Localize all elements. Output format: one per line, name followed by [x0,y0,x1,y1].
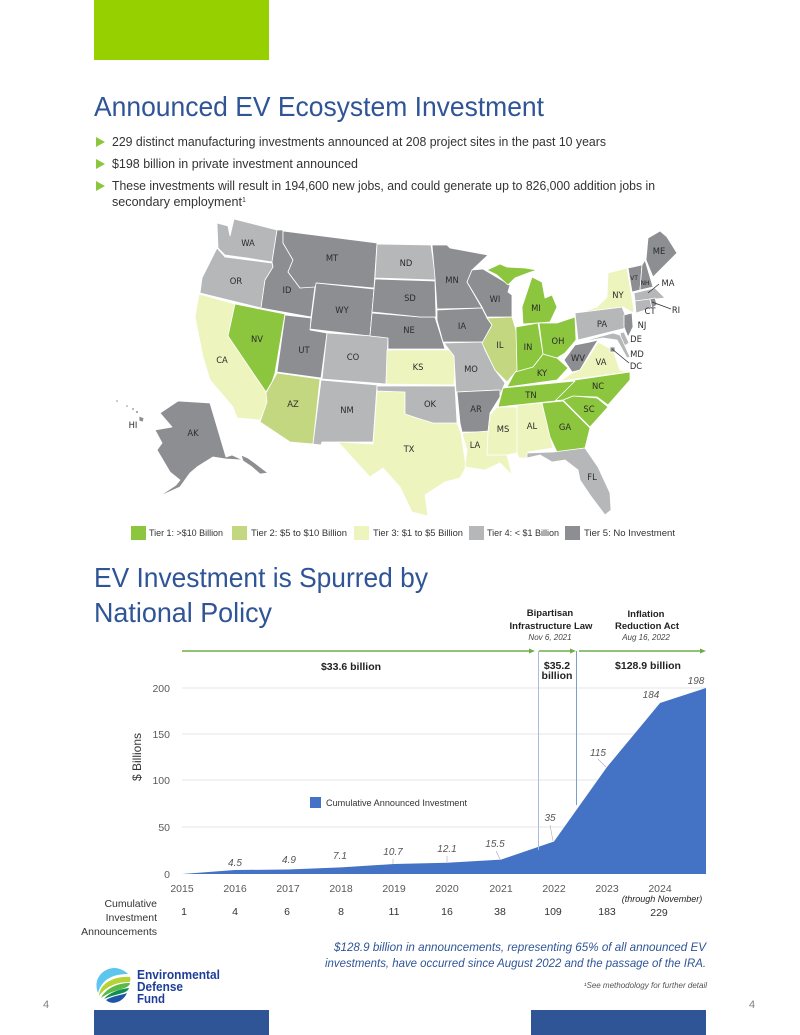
legend tier 3 [354,526,463,540]
state labels: SC [583,404,595,414]
state labels: PA [597,319,607,329]
data leader lines [393,759,606,864]
legend tier 1 [131,526,223,540]
bullet 3: secondary employment [112,195,243,209]
state labels: DE [630,334,642,344]
y axis labels: 0 [164,869,170,881]
logo wordmark: Defense [137,980,183,994]
state labels: KY [537,368,548,378]
page number right: 4 [749,999,755,1011]
state labels: LA [470,440,481,450]
state labels: OR [230,276,242,286]
data value labels: 12.1 [437,844,457,855]
chart legend: Cumulative Announced Investment [326,798,467,808]
y axis title: $ Billions [130,733,144,781]
policy header: Inflation Reduction Act: Inflation [628,609,665,620]
x axis years: 2018 [329,883,353,895]
period arrows [182,648,706,654]
data value labels [228,676,705,869]
y axis labels: 200 [152,683,170,695]
x axis years: 2015 [170,883,194,895]
state labels: ND [400,258,412,268]
state labels: CT [645,306,656,316]
policy date lines [538,651,576,850]
legend tier 5: Tier 5: No Investment [584,528,675,539]
state labels: WY [335,305,350,315]
period amounts [321,660,681,682]
state labels: UT [298,345,311,355]
announcements counts: 109 [544,906,562,918]
announcements counts: 1 [181,906,187,918]
legend tier 5 [565,526,675,540]
footer bar right [531,1010,706,1035]
state labels: KS [413,362,423,372]
state labels: WV [571,353,585,363]
top green banner [94,0,269,60]
state labels: IN [524,342,532,352]
bullet list [96,135,655,209]
legend tier 2: Tier 2: $5 to $10 Billion [251,528,347,539]
state labels: MA [662,278,675,288]
state labels: WA [241,238,255,248]
state labels: VT [630,275,638,282]
period amounts: $128.9 billion [615,660,681,672]
announcements counts [181,906,668,919]
state labels: ID [283,285,291,295]
policy header: Bipartisan Infrastructure Law [510,608,593,642]
state labels: GA [559,422,571,432]
footnote: ¹See methodology for further detail [584,981,707,990]
state labels: TN [524,390,537,400]
x axis years: 2020 [435,883,459,895]
Hawaii island dots [116,400,138,413]
state labels: ME [653,246,665,256]
state labels: AK [187,428,199,438]
data value labels: 4.9 [282,855,296,866]
data value labels: 4.5 [228,858,242,869]
x axis years: 2017 [276,883,300,895]
title: national policy [94,562,428,628]
bullet 2: $198 billion in private investment announced [112,157,358,171]
bullet 1: 229 distinct manufacturing investments announced at 208 project sites in the past 10 years [112,135,606,149]
logo wordmark [137,968,220,1006]
footer bar left [94,1010,269,1035]
announcements row label: Investment [106,912,157,924]
policy header: Bipartisan Infrastructure Law: Infrastructure Law [510,621,593,632]
state labels: NE [403,325,415,335]
chart takeaway: investments, have occurred since August 2022 and the passage of the IRA. [325,956,706,970]
title: national policy: EV Investment is Spurred by [94,562,428,593]
state labels: NM [340,405,354,415]
state labels: MD [630,349,644,359]
state shapes [139,219,677,516]
state labels [129,238,680,482]
state labels: WI [490,294,500,304]
bullet 3: 1 [242,197,246,204]
x axis years: 2024 [648,883,672,895]
x axis years: 2016 [223,883,247,895]
state labels: AL [527,421,538,431]
state labels: DC [630,361,642,371]
announcements counts: 6 [284,906,290,918]
state labels: MO [464,364,478,374]
state labels: NY [612,290,625,300]
announcements counts: 4 [232,906,238,918]
state labels: OH [552,336,564,346]
state labels: RI [672,305,680,315]
data value labels: 7.1 [333,851,347,862]
announcements counts: 183 [598,906,616,918]
state labels: NJ [638,320,646,330]
announcements counts: 16 [441,906,453,918]
period amounts: billion [542,670,572,682]
state labels: TX [403,444,415,454]
legend tier 4: Tier 4: < $1 Billion [487,528,559,539]
period amounts: $33.6 billion [321,661,381,673]
state labels: MI [531,303,541,313]
data value labels: 198 [688,676,705,687]
x axis years: 2021 [489,883,513,895]
y axis labels: 100 [152,775,170,787]
state labels: AR [470,404,482,414]
logo wordmark: Fund [137,992,165,1006]
policy header: Bipartisan Infrastructure Law: Nov 6, 2021 [528,633,572,642]
x axis years: 2023 [595,883,619,895]
y axis labels: 50 [158,822,170,834]
logo wordmark: Environmental [137,968,220,982]
page number left: 4 [43,999,49,1011]
announcements row label: Cumulative [104,898,157,910]
state labels: MT [326,253,339,263]
logo mark [96,968,130,1003]
data value labels: 184 [643,690,660,701]
announcements row label: Announcements [81,926,157,938]
state labels: IL [496,340,504,350]
chart takeaway: $128.9 billion in announcements, representing 65% of all announced EV [333,940,707,954]
state labels: HI [129,420,137,430]
state labels: MS [497,424,509,434]
bullet 3 [96,179,655,209]
map legend [131,526,675,540]
state labels: MN [445,275,459,285]
policy header: Inflation Reduction Act [615,609,680,642]
legend tier 4 [469,526,559,540]
announcements counts: 229 [650,907,668,919]
state labels: VA [596,357,607,367]
policy header: Inflation Reduction Act: Aug 16, 2022 [621,633,670,642]
policy header: Bipartisan Infrastructure Law: Bipartisan [527,608,573,619]
legend tier 1: Tier 1: >$10 Billion [149,528,223,539]
title: national policy: National Policy [94,597,272,628]
state labels: CO [347,352,360,362]
policy header: Inflation Reduction Act: Reduction Act [615,621,680,632]
area chart [130,651,706,895]
map of US states by investment tier [116,219,680,516]
state labels: OK [424,399,437,409]
state labels: SD [404,293,416,303]
state labels: AZ [287,399,299,409]
x axis years: 2019 [382,883,406,895]
legend tier 3: Tier 3: $1 to $5 Billion [373,528,463,539]
x axis years: 2022 [542,883,566,895]
y axis labels [152,683,170,881]
announcements counts: 8 [338,906,344,918]
state labels: CA [216,355,228,365]
legend tier 2 [232,526,347,540]
data value labels: 115 [590,748,606,759]
state labels: NC [592,381,604,391]
through November note: (through November) [622,894,702,904]
gridlines [182,688,706,827]
announcements counts: 11 [389,906,400,918]
leader lines [612,284,671,363]
data value labels: 10.7 [383,847,403,858]
chart takeaway [325,940,707,970]
x axis years [170,883,672,895]
state labels: FL [587,472,597,482]
state labels: IA [458,321,466,331]
y axis labels: 150 [152,729,170,741]
state labels: NH [640,280,650,287]
announcements row label [81,898,157,938]
bullet 3: These investments will result in 194,600 new jobs, and could generate up to 826,000 addition jobs in [112,179,655,193]
period amounts: $35.2 [544,660,570,672]
data value labels: 35 [544,813,556,824]
logo: Environmental Defense Fund [96,968,220,1006]
data value labels: 15.5 [485,839,505,850]
state labels: NV [251,334,263,344]
announcements counts: 38 [494,906,506,918]
title: announced investment: Announced EV Ecosystem Investment [94,91,544,122]
cumulative investment area [182,688,706,874]
